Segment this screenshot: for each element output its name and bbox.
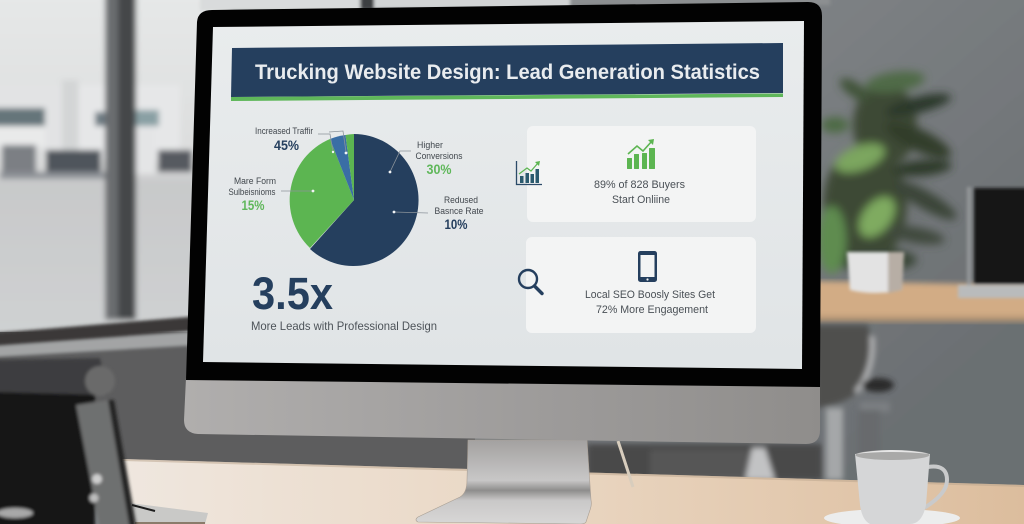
desk shadow line [122,459,1024,487]
icon: small analytics chart [516,161,542,184]
chair behind monitor [587,325,894,480]
cup handle [924,467,947,508]
plant [818,68,961,274]
label: reduced bounce rate: 10% [444,217,468,232]
label: more form submissions [228,176,276,213]
card: local SEO [526,237,756,333]
top wall strip [200,0,830,11]
card text [594,179,685,206]
card: buyers [527,126,756,222]
monitor bezel [186,2,822,387]
callout lines [281,131,428,213]
chair knob [85,366,115,396]
label: increased traffic [255,126,313,153]
label: more form submissions: Sulbeisnioms [228,187,276,197]
window sill [0,316,200,346]
chair frame [76,400,135,524]
label: higher conversions: Conversions [416,151,463,161]
label: reduced bounce rate: Redused [444,195,478,205]
trailers and trucks outside the window [0,80,192,179]
cup rim [856,450,930,460]
card text: 72% More Engagement [596,304,709,316]
title: Trucking Website Design: Lead Generation Statistics [255,60,760,84]
big stat caption: More Leads with Professional Design [251,319,437,333]
slice: navy [310,134,419,266]
desk [122,459,1024,524]
card text [585,289,716,316]
card text: 89% of 828 Buyers [594,179,685,191]
screen panel [203,21,804,369]
foreground chair [0,358,137,524]
label: reduced bounce rate [434,195,484,232]
icon: magnifier [519,270,542,294]
monitor cable [618,441,633,487]
chair headrest [0,358,108,395]
notebook and pen on desk [130,503,208,524]
card text: Start Onliine [612,194,670,206]
label: increased traffic: Increased Traffir [255,126,313,136]
monitor stand [416,440,591,524]
label: higher conversions: 30% [426,162,452,177]
laptop [958,187,1024,298]
slice: green large [290,139,354,248]
big stat [251,268,437,333]
label: increased traffic: 45% [274,138,299,153]
label: higher conversions [416,140,463,177]
wall below window [0,332,475,484]
screen: infographic [203,21,804,369]
shelf on the right [815,281,1024,322]
cup body [855,454,930,524]
plant pot [847,252,904,293]
slice: blue [330,135,354,200]
icon: green growth chart [627,139,655,169]
label: more form submissions: Mare Form [234,176,276,186]
title banner [231,43,783,101]
card text: Local SEO Boosly Sites Get [585,289,716,301]
icon: phone [638,251,657,282]
window frame post [105,0,136,320]
big stat: 3.5x [252,268,333,319]
sill highlight [0,331,200,357]
monitor chin [184,378,820,444]
label: more form submissions: 15% [242,198,264,213]
slice: green small [346,134,354,200]
pie chart [290,134,419,266]
coffee cup and saucer [824,450,960,524]
callout dots [312,151,395,213]
label: higher conversions: Higher [417,140,443,150]
label: reduced bounce rate: Basnce Rate [434,206,484,216]
